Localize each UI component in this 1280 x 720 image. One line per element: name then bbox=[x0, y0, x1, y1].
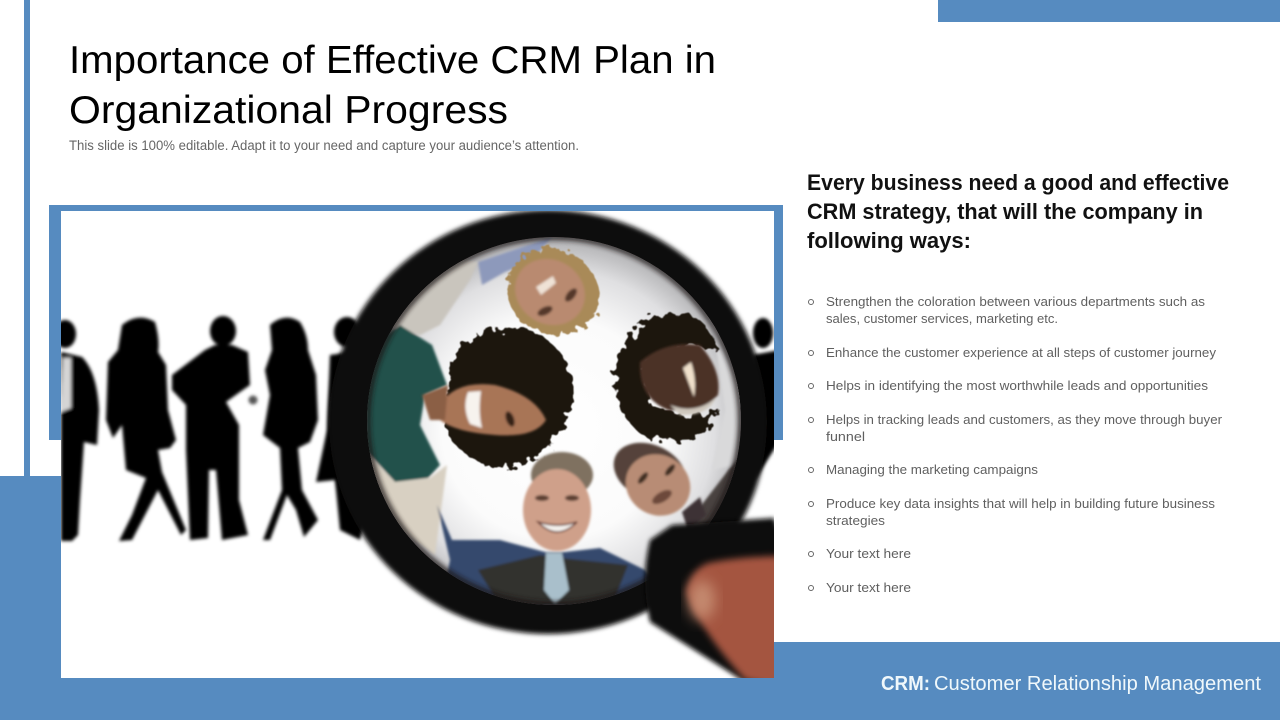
top woman bbox=[504, 244, 600, 338]
bottom man bbox=[523, 452, 593, 551]
intro heading: Every business need a good and effective bbox=[807, 170, 1229, 195]
bullet 6: strategies bbox=[826, 513, 886, 528]
title: Importance of Effective CRM Plan in bbox=[69, 39, 716, 82]
title: Organizational Progress bbox=[69, 89, 508, 132]
inner edge shadow bbox=[367, 237, 741, 605]
bullet list bbox=[808, 294, 1223, 595]
magnifier handle bbox=[642, 514, 774, 678]
footer band right bbox=[774, 642, 1280, 720]
bullet 2: Enhance the customer experience at all steps of customer journey bbox=[826, 345, 1216, 360]
lower left block bbox=[0, 476, 61, 720]
bullet 4 bbox=[808, 412, 1223, 444]
bullet 1 bbox=[808, 294, 1206, 326]
bullet 4: funnel bbox=[826, 429, 865, 444]
top right accent bar bbox=[938, 0, 1280, 22]
bullet 8: Your text here bbox=[826, 580, 911, 595]
bullet 6: Produce key data insights that will help in building future business bbox=[826, 496, 1216, 511]
clothing at lens edge bbox=[366, 237, 745, 612]
footer caption: Customer Relationship Management bbox=[934, 673, 1261, 695]
intro heading bbox=[807, 170, 1229, 253]
bottom band bbox=[0, 678, 1280, 720]
bullet 7: Your text here bbox=[826, 546, 911, 561]
photo: magnifying glass over business silhouettes bbox=[54, 210, 790, 690]
left woman with curly hair bbox=[422, 329, 572, 468]
silhouettes of business people bbox=[54, 316, 780, 541]
bullet 1: Strengthen the coloration between various departments such as bbox=[826, 294, 1206, 309]
bullet 4: Helps in tracking leads and customers, as they move through buyer bbox=[826, 412, 1223, 427]
bullet 6 bbox=[808, 496, 1216, 528]
title bbox=[69, 39, 716, 132]
subtitle: This slide is 100% editable. Adapt it to your need and capture your audience’s attention. bbox=[69, 138, 579, 153]
right woman with curly hair bbox=[615, 312, 720, 440]
right man bbox=[612, 440, 706, 526]
intro heading: CRM strategy, that will the company in bbox=[807, 199, 1203, 224]
bullet 1: sales, customer services, marketing etc. bbox=[826, 311, 1058, 326]
lens scene with people looking down bbox=[366, 234, 745, 612]
magnifier rim bbox=[329, 210, 767, 634]
finger bbox=[681, 551, 774, 678]
intro heading: following ways: bbox=[807, 228, 971, 253]
picture frame bbox=[49, 205, 783, 440]
bullet 3: Helps in identifying the most worthwhile leads and opportunities bbox=[826, 378, 1209, 393]
bullet 5: Managing the marketing campaigns bbox=[826, 462, 1039, 477]
left vertical rail bbox=[24, 0, 30, 476]
footer caption: CRM: bbox=[881, 673, 930, 695]
